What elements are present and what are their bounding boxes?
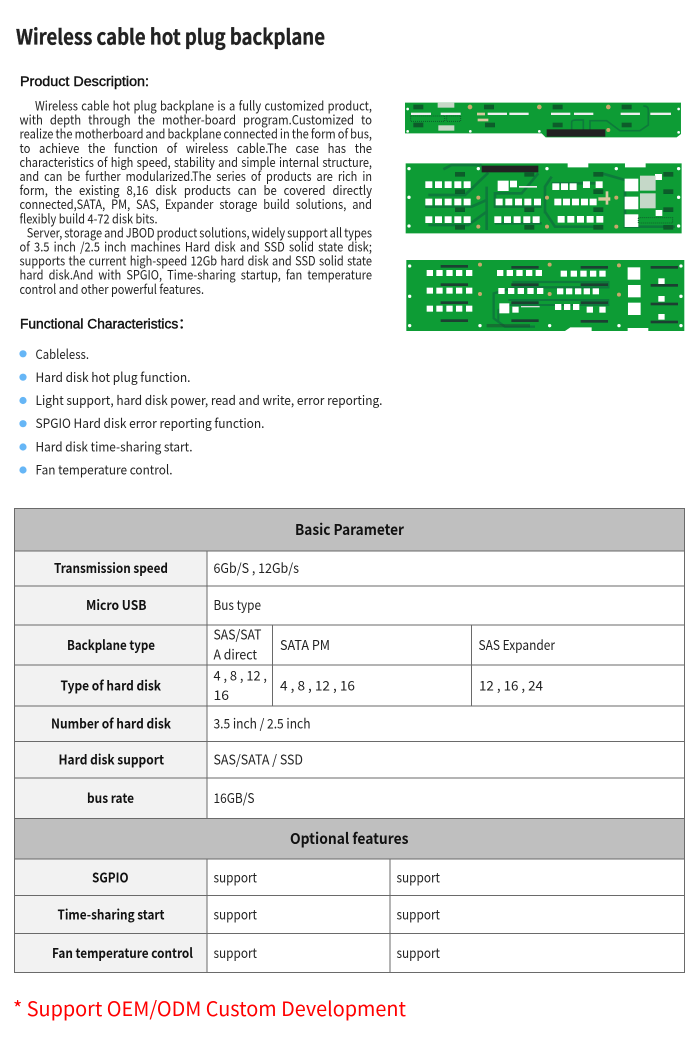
- row labels: bus rate: [87, 787, 134, 807]
- feature list: Hard disk time-sharing start.: [36, 436, 192, 456]
- image: backplane board 3: [406, 260, 684, 331]
- text block: product description: realize the motherboard and backplane connected in the form of bus,: [20, 124, 372, 143]
- text block: product description: form, the existing 8,16 disk products can be covered directly: [20, 180, 372, 199]
- optional feature labels: Time-sharing start: [58, 904, 165, 924]
- row labels: Number of hard disk: [51, 712, 171, 732]
- optional feature values: support: [214, 866, 257, 886]
- text block: product description: supports the current high-speed 12Gb hard disk and SSD solid state: [20, 251, 372, 270]
- optional feature labels: Fan temperature control: [52, 942, 193, 962]
- text block: product description: and can be further modularized.The series of products are rich in: [20, 166, 372, 185]
- optional feature values: support: [396, 904, 440, 924]
- row labels: Type of hard disk: [60, 674, 161, 694]
- optional feature labels: [52, 866, 193, 962]
- feature list: Hard disk hot plug function.: [36, 367, 190, 386]
- optional feature values: support: [396, 942, 440, 962]
- row values: 6Gb/S , 12Gb/s: [214, 557, 299, 577]
- row values: 16GB/S: [214, 787, 255, 807]
- text block: product description: flexibly build 4-72 disk bits.: [20, 208, 158, 227]
- image: backplane board 2: [406, 163, 682, 233]
- table grid: [14, 508, 684, 972]
- row values: SAS/SATA / SSD: [214, 748, 303, 768]
- feature list: [19, 344, 383, 478]
- text block: product description: hard disk.And with SPGIO, Time-sharing startup, fan temperature: [20, 265, 372, 284]
- text block: product description: to achieve the function of wireless cable.The case has the: [20, 138, 372, 157]
- title: Wireless cable hot plug backplane: [16, 22, 325, 52]
- row labels: Hard disk support: [58, 748, 164, 768]
- text block: product description: of 3.5 inch /2.5 inch machines Hard disk and SSD solid state disk;: [20, 236, 372, 256]
- optional feature values: [214, 866, 440, 962]
- text block: product description: characteristics of high speed, stability and simple internal structure,: [20, 152, 372, 171]
- image: backplane board 1: [405, 103, 681, 137]
- row values: 12 , 16 , 24: [479, 674, 544, 694]
- heading: product description: Product Description:: [20, 74, 149, 89]
- footer callout: * Support OEM/ODM Custom Development: [13, 993, 406, 1022]
- row values: Bus type: [214, 594, 261, 614]
- row labels: [51, 557, 171, 807]
- table backgrounds: [14, 508, 684, 972]
- parameter table: [14, 508, 684, 972]
- row values: A direct: [214, 644, 257, 664]
- heading: functional characteristics: Functional Characteristics：: [20, 316, 192, 332]
- text block: product description: Server, storage and JBOD product solutions, widely support all types: [27, 222, 372, 241]
- row values: 3.5 inch / 2.5 inch: [214, 712, 310, 732]
- row labels: Transmission speed: [54, 557, 168, 577]
- row values: 4 , 8 , 12 , 16: [280, 674, 355, 694]
- section heading: optional features: Optional features: [290, 828, 408, 849]
- optional feature values: support: [396, 866, 440, 886]
- row values: [214, 557, 556, 807]
- row values: SAS/SAT: [214, 624, 262, 644]
- feature list: SPGIO Hard disk error reporting function.: [36, 413, 264, 432]
- row values: 16: [214, 684, 229, 704]
- row labels: Micro USB: [86, 594, 146, 614]
- row values: SAS Expander: [478, 634, 556, 654]
- text block: product description: control and other powerful features.: [20, 279, 204, 298]
- text block: product description: with depth through the mother-board program.Customized to: [20, 110, 372, 129]
- section heading: basic parameter: Basic Parameter: [295, 519, 404, 540]
- feature list: Cableless.: [36, 344, 89, 363]
- row labels: Backplane type: [67, 634, 155, 654]
- text block: product description: connected,SATA, PM, SAS, Expander storage build solutions, and: [20, 194, 372, 213]
- row values: SATA PM: [280, 634, 330, 654]
- row values: 4 , 8 , 12 ,: [214, 664, 267, 684]
- feature list: Light support, hard disk power, read and write, error reporting.: [36, 390, 382, 409]
- text block: product description: Wireless cable hot plug backplane is a fully customized product,: [35, 96, 372, 114]
- text block: product description: [20, 96, 372, 298]
- feature list: Fan temperature control.: [36, 460, 172, 478]
- optional feature values: support: [214, 904, 257, 924]
- optional feature values: support: [214, 942, 257, 962]
- optional feature labels: SGPIO: [92, 866, 128, 886]
